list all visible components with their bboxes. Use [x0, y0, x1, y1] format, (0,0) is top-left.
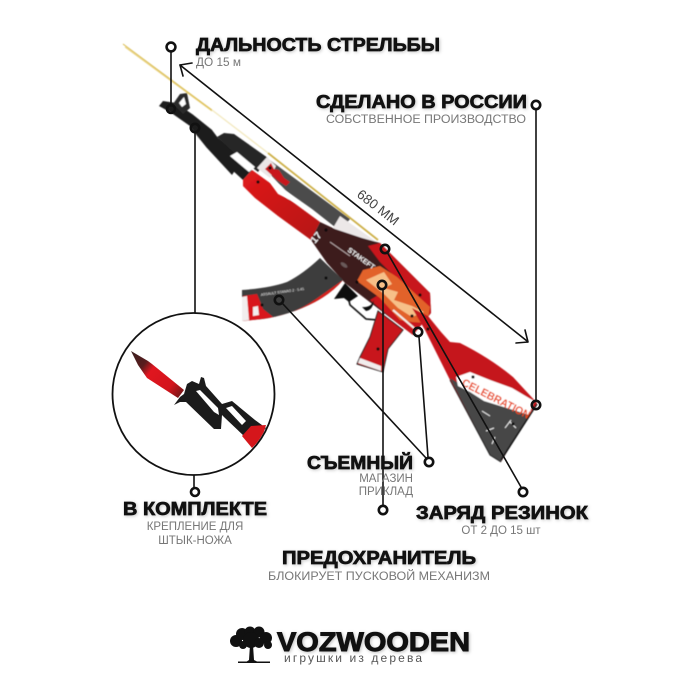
- rubber band: [123, 44, 378, 240]
- barrel and front sight: [159, 93, 268, 180]
- heading: charge: ЗАРЯД РЕЗИНОК: [416, 503, 589, 523]
- callout line: charge: [381, 245, 527, 496]
- heading: safety: БЛОКИРУЕТ ПУСКОВОЙ МЕХАНИЗМ: [268, 570, 490, 583]
- heading: range: ДАЛЬНОСТЬ СТРЕЛЬБЫ: [196, 35, 440, 55]
- heading: removable: СЪЕМНЫЙ: [307, 452, 413, 473]
- heading: made in Russia: [316, 92, 527, 126]
- heading: charge: [416, 503, 589, 537]
- magazine: ASSAULT STANAG 2 · 5.45: [261, 287, 304, 297]
- callout line: accessory: [191, 124, 199, 496]
- pistol grip: [357, 311, 403, 372]
- heading: range: ДО 15 м: [196, 57, 241, 69]
- receiver markings: STAKEFT: [346, 247, 376, 272]
- callout line: range: [167, 43, 175, 113]
- receiver red panel: [368, 243, 431, 335]
- dimension label: 680 ММ: [354, 187, 402, 228]
- heading: range: [196, 35, 440, 69]
- receiver markings: [309, 230, 376, 272]
- heading: charge: ОТ 2 ДО 15 шт: [461, 525, 541, 537]
- dimension arrow: [180, 63, 528, 343]
- stock: CELEBRATION: [460, 377, 532, 422]
- receiver orange graphic: [357, 266, 430, 323]
- icon: bayonet mount: [174, 377, 266, 437]
- icon: tree: [230, 626, 272, 663]
- logo tagline: игрушки из дерева: [284, 651, 422, 665]
- receiver: [311, 222, 431, 335]
- heading: in the set: КРЕПЛЕНИЕ ДЛЯ: [147, 521, 243, 533]
- heading: removable: ПРИКЛАД: [359, 486, 413, 498]
- red handguard: [243, 170, 320, 240]
- stock: [412, 308, 537, 462]
- icon: bayonet blade: [131, 351, 184, 398]
- heading: safety: ПРЕДОХРАНИТЕЛЬ: [282, 548, 476, 568]
- callout line: safety: [378, 281, 387, 514]
- heading: safety: [268, 548, 490, 583]
- callout line: magazine: [275, 296, 433, 466]
- heading: made in Russia: СДЕЛАНО В РОССИИ: [316, 92, 527, 112]
- heading: made in Russia: СОБСТВЕННОЕ ПРОИЗВОДСТВО: [326, 114, 526, 126]
- heading: in the set: ШТЫК-НОЖА: [158, 535, 232, 547]
- heading: in the set: В КОМПЛЕКТЕ: [123, 499, 267, 519]
- upper handguard: [257, 157, 378, 250]
- magazine: [242, 258, 343, 321]
- gun screws: [256, 166, 515, 426]
- rifle illustration: [123, 44, 537, 462]
- icon: bayonet barrel stub: [242, 425, 266, 448]
- callout line: made in Russia: [532, 101, 540, 409]
- heading: removable: МАГАЗИН: [359, 473, 413, 485]
- logo: [230, 626, 470, 665]
- heading: removable: [307, 452, 413, 498]
- receiver markings: 17: [309, 230, 325, 246]
- heading: in the set: [123, 499, 267, 547]
- trigger group: [334, 283, 384, 320]
- panel: bayonet inset: [112, 313, 274, 475]
- logo wordmark: VOZWOODEN: [277, 627, 470, 657]
- white gap in handguard: [270, 181, 298, 203]
